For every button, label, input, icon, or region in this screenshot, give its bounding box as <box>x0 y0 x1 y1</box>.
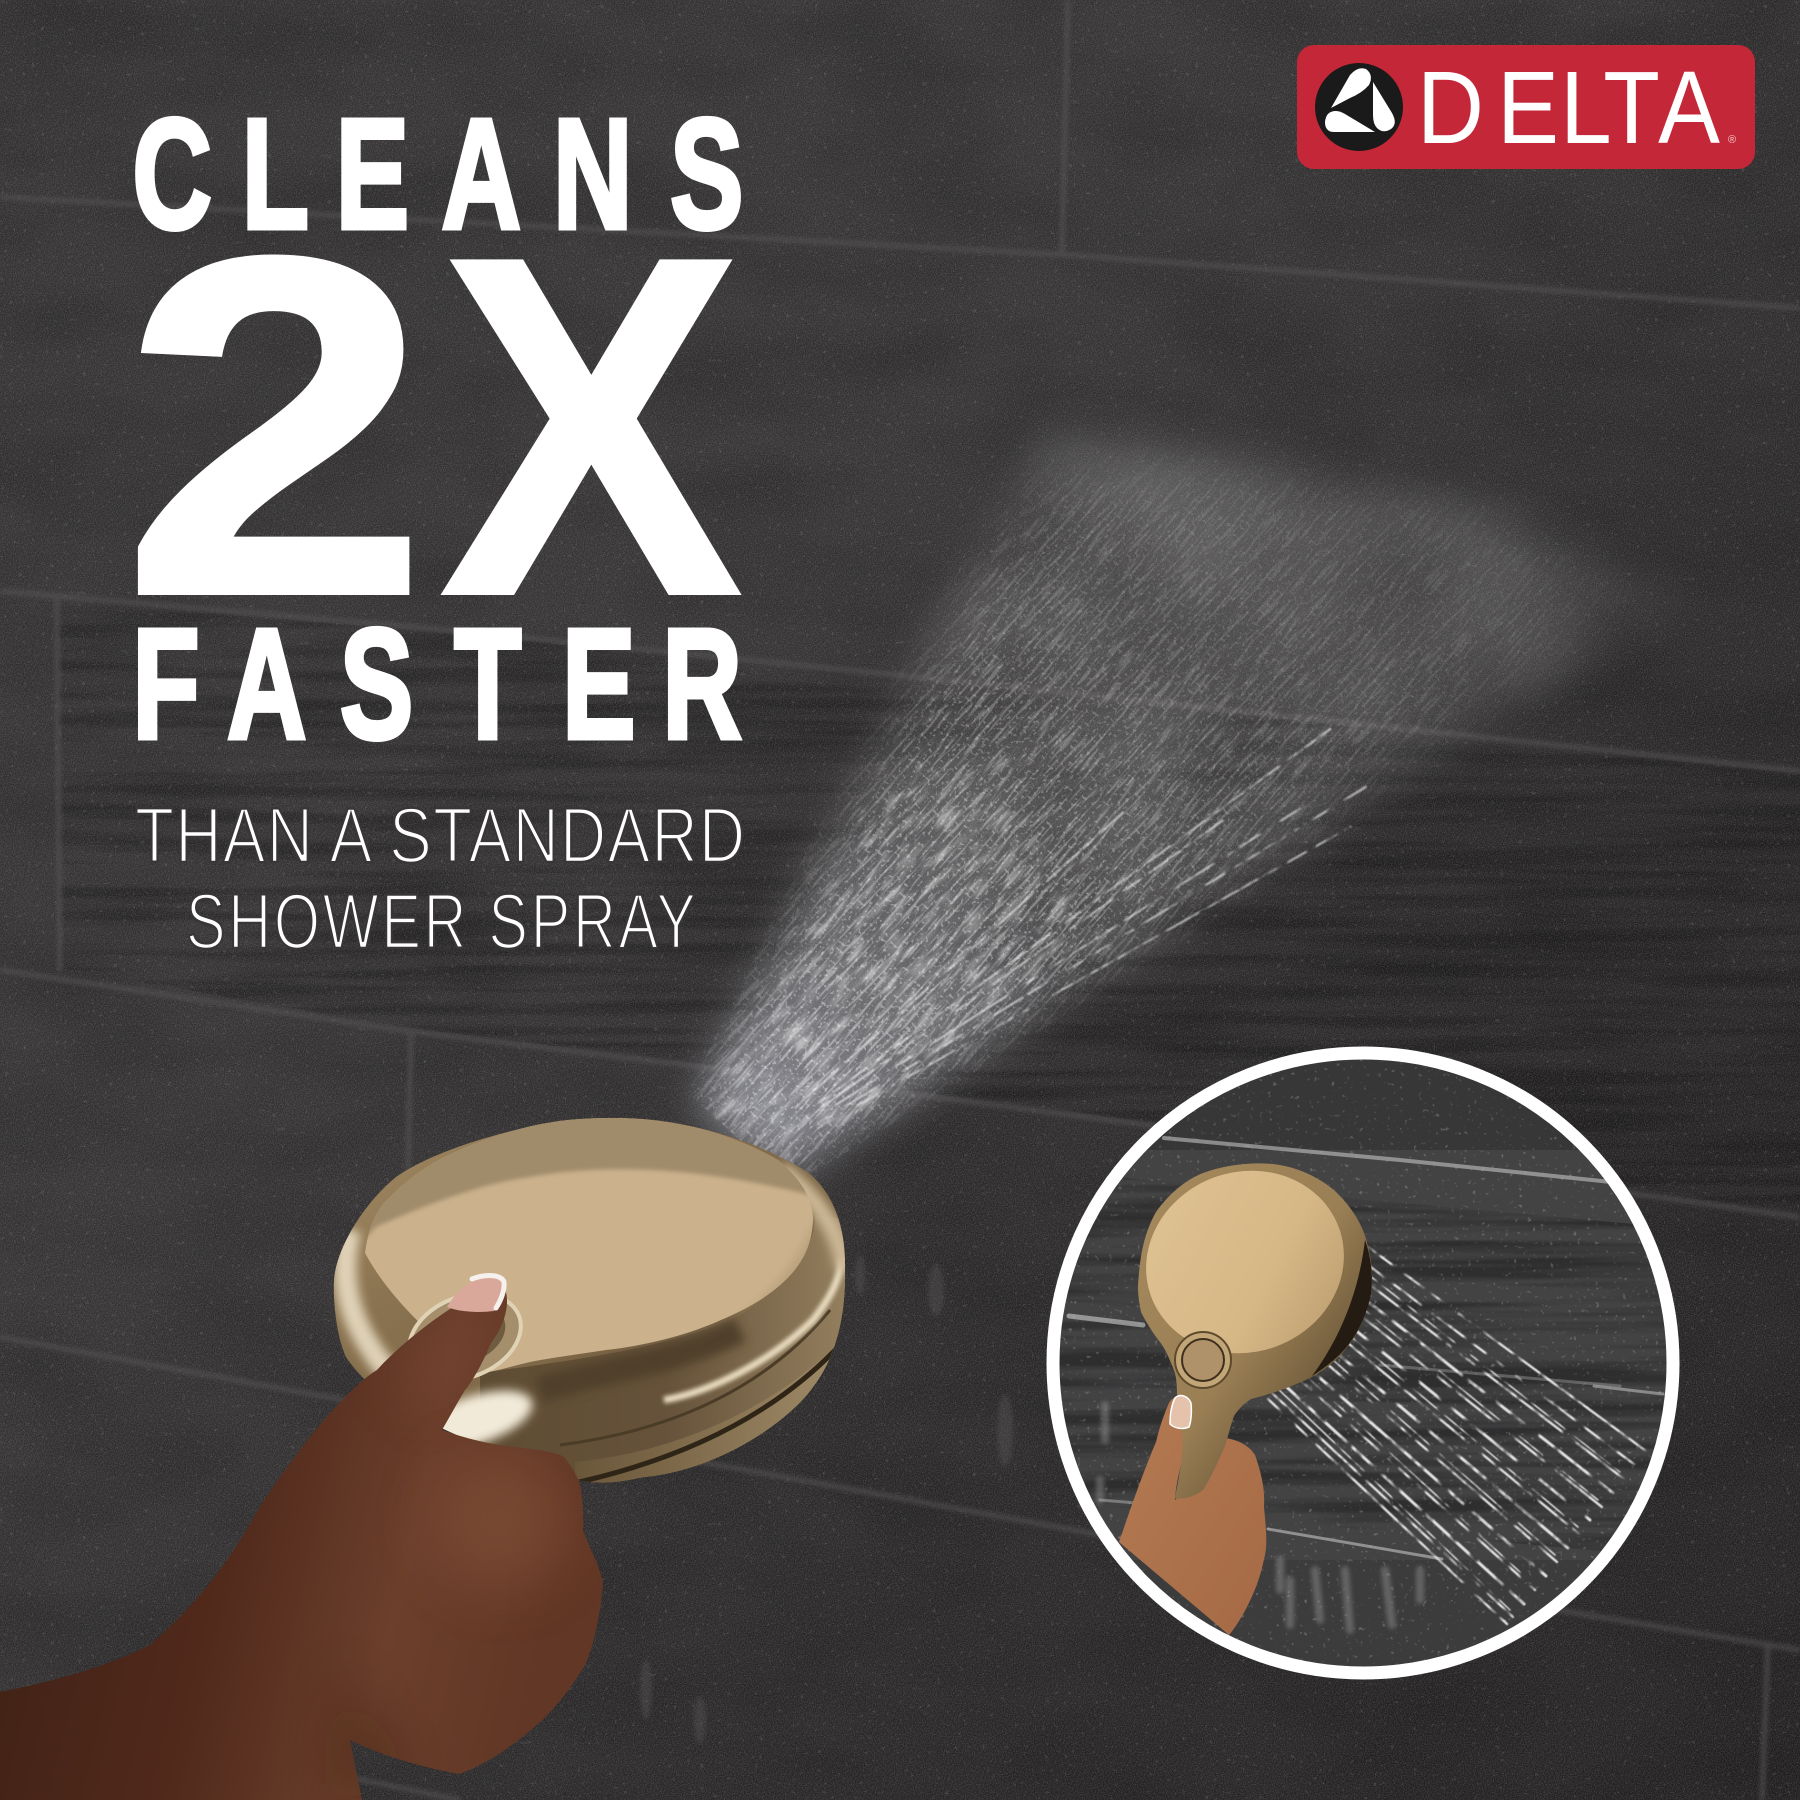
rim shading and highlights <box>345 1170 850 1500</box>
fingernail <box>447 1275 505 1312</box>
subhead: than a standard shower spray <box>135 792 745 965</box>
head face <box>365 1118 813 1372</box>
hand shading <box>330 1456 568 1796</box>
headline: 2X <box>121 158 744 696</box>
inset shower head body <box>1138 1163 1372 1499</box>
hand and forearm <box>0 1285 603 1800</box>
headline: FASTER: FASTER <box>132 596 742 772</box>
inset background <box>1060 1060 1666 1666</box>
hand pressing the button <box>0 1275 603 1800</box>
registered mark: ® <box>1728 134 1736 146</box>
inset head face <box>1120 1143 1370 1381</box>
inset: shower head in use, in white circle <box>1040 1040 1700 1690</box>
head body <box>334 1118 845 1483</box>
button ring <box>396 1278 534 1396</box>
nail tip <box>472 1276 504 1308</box>
Delta triangle icon <box>1315 63 1403 151</box>
inset button <box>1175 1332 1231 1388</box>
headline: CLEANS: CLEANS <box>132 86 743 262</box>
Delta logo badge <box>1297 45 1755 169</box>
wordmark: DELTA <box>1417 49 1721 165</box>
water jets <box>1268 1247 1646 1624</box>
inset head dark edge <box>1312 1240 1372 1376</box>
water spray cone and mist from the spray head <box>678 419 1640 1184</box>
inset white ring <box>1053 1053 1673 1673</box>
main product: bronze spray head <box>334 1100 850 1500</box>
badge background <box>1297 45 1755 169</box>
subhead: than a standard shower spray: SHOWER SPRAY <box>186 877 696 965</box>
inset thumbnail <box>1170 1396 1191 1428</box>
subhead: than a standard shower spray: THAN A STANDARD <box>135 792 745 879</box>
headline: 2X: 2 <box>121 158 429 696</box>
headline: 2X: X <box>440 158 744 696</box>
inset hand <box>1119 1396 1266 1635</box>
